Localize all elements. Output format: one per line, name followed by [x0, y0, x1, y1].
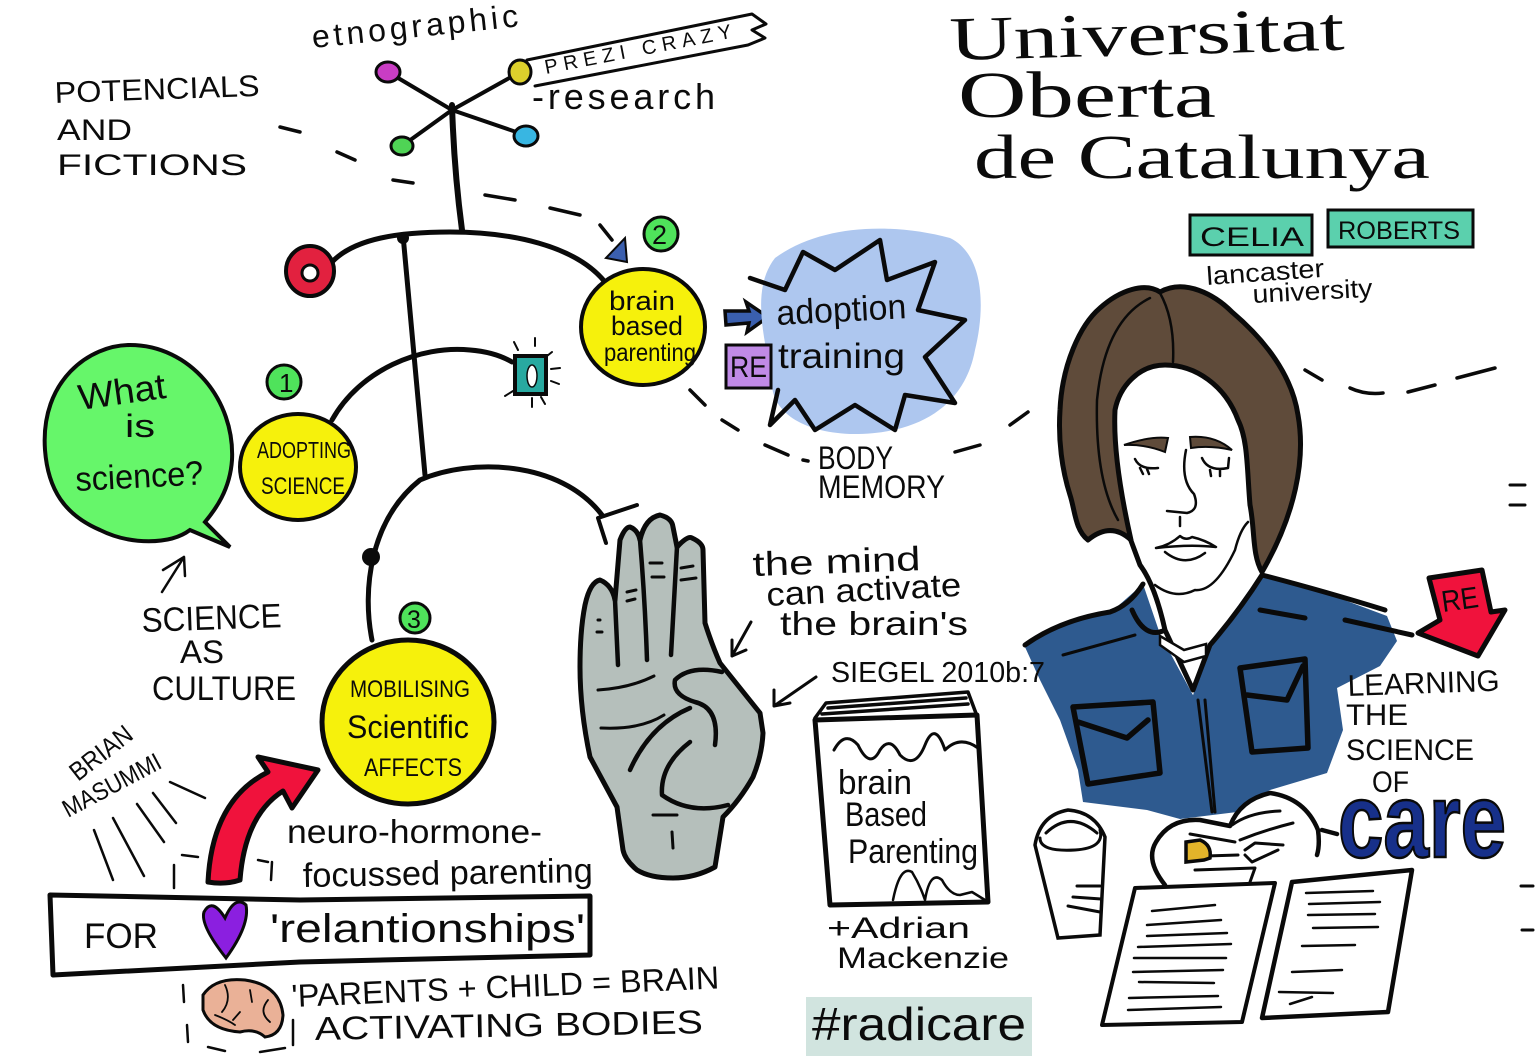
annotation: the mind can activate the brain's: can activate	[765, 566, 962, 613]
burst: adoption training: training	[778, 337, 905, 376]
bubble: mobilising scientific affects: MOBILISING	[350, 676, 470, 703]
icon: glowing teal device	[505, 338, 560, 407]
affiliation: Lancaster University	[1205, 253, 1373, 309]
icon: book brain based parenting	[815, 692, 988, 905]
label: body memory: MEMORY	[818, 469, 945, 505]
dashed connector to blue arrowhead	[280, 127, 627, 262]
speaker name tags	[1190, 210, 1473, 255]
bubble: adopting science: ADOPTING	[257, 437, 351, 463]
label: potencials and fictions: FICTIONS	[57, 149, 247, 182]
icon: book brain based parenting: brain	[838, 764, 912, 802]
burst: adoption training: adoption	[775, 287, 907, 333]
label: neuro-hormone-focussed parenting: neuro-hormone-	[287, 813, 542, 850]
banner: for love relationships: FOR	[84, 917, 158, 956]
label: science as culture with arrow: AS	[180, 634, 224, 670]
bubble: brain based parenting: parenting	[604, 339, 696, 367]
title: Universitat Oberta de Catalunya: Universitat	[949, 0, 1345, 74]
face and neck	[1115, 366, 1258, 695]
label: research: -research	[532, 76, 715, 117]
annotation: Brian Massumi with rays: BRIAN	[63, 719, 138, 787]
tag: RE purple	[726, 345, 771, 388]
red RE arrow	[1418, 570, 1505, 656]
annotation: Brian Massumi with rays	[58, 719, 205, 880]
label: learning the science of: SCIENCE	[1346, 734, 1474, 767]
icon: red curved arrow	[208, 757, 318, 883]
hair	[1059, 287, 1300, 572]
banner: Prezi crazy	[527, 14, 766, 86]
icon: red target node	[286, 246, 334, 296]
blue arrow to adoption training	[725, 302, 768, 332]
bubble: mobilising scientific affects: AFFECTS	[364, 754, 462, 782]
bubble: brain based parenting: brain	[609, 286, 675, 316]
label: body memory: BODY	[818, 440, 893, 476]
dashed frame around heart and brain	[174, 855, 293, 1052]
number badge 2: 2	[652, 220, 667, 250]
label: science as culture with arrow: CULTURE	[152, 670, 296, 708]
label: learning the science of	[1346, 665, 1500, 799]
label: science as culture with arrow: SCIENCE	[141, 597, 282, 640]
speech bubble: what is science	[45, 345, 232, 547]
label: parents + child = brain activating bodies	[291, 959, 720, 1047]
eyes, nose and mouth	[1135, 450, 1248, 594]
annotation: the mind can activate the brain's: the mind	[752, 540, 921, 584]
label: parents + child = brain activating bodies: ACTIVATING BODIES	[314, 1003, 703, 1047]
jacket	[1025, 575, 1397, 819]
number badge 3: 3	[407, 606, 421, 634]
speech bubble: what is science: science?	[74, 454, 204, 499]
margin marks	[1510, 485, 1533, 930]
burst: adoption training	[750, 229, 981, 434]
banner: Prezi crazy: PREZI CRAZY	[543, 21, 733, 79]
title: Universitat Oberta de Catalunya	[949, 0, 1430, 192]
red RE arrow: RE	[1439, 581, 1481, 619]
speech bubble: what is science: What	[75, 365, 168, 418]
main mobile branches	[332, 232, 637, 640]
bubble: adopting science	[240, 414, 356, 520]
label: learning the science of: OF	[1372, 766, 1409, 799]
icon: pink brain	[203, 980, 283, 1037]
eyebrows	[1124, 437, 1232, 452]
label: parents + child = brain activating bodies: 'PARENTS + CHILD = BRAIN	[291, 959, 720, 1014]
necklace	[1160, 636, 1206, 662]
label: neuro-hormone-focussed parenting: focussed parenting	[302, 852, 593, 895]
label: + Adrian Mackenzie	[827, 912, 1009, 975]
label: + Adrian Mackenzie: +Adrian	[827, 912, 970, 945]
label: potencials and fictions	[54, 70, 260, 182]
bubble: brain based parenting: based	[611, 311, 683, 341]
icon: hands holding yellow object	[1152, 793, 1337, 885]
label: neuro-hormone-focussed parenting	[287, 813, 593, 895]
bubble: mobilising scientific affects	[322, 640, 494, 804]
pockets	[1073, 659, 1308, 784]
speaker name tags: ROBERTS	[1338, 217, 1460, 245]
banner: for love relationships	[50, 895, 590, 975]
number badge 2	[644, 217, 678, 251]
number badge 1	[267, 365, 301, 399]
annotation: the mind can activate the brain's: the brain's	[780, 605, 968, 642]
label: potencials and fictions: POTENCIALS	[54, 70, 260, 110]
dashed connector through body memory	[690, 368, 1495, 461]
label: + Adrian Mackenzie: Mackenzie	[837, 942, 1009, 975]
tag: RE purple: RE	[730, 351, 767, 384]
number badge 3	[400, 603, 430, 634]
icon: book brain based parenting: Based	[845, 796, 927, 834]
bubble: brain based parenting	[581, 269, 705, 385]
top mobile with coloured nodes	[376, 60, 538, 230]
bubble: adopting science: SCIENCE	[261, 473, 345, 500]
number badge 1: 1	[279, 368, 293, 398]
title: Universitat Oberta de Catalunya: Oberta	[958, 59, 1216, 132]
label: learning the science of: THE	[1346, 699, 1408, 732]
banner: for love relationships: 'relantionships'	[270, 907, 585, 951]
portrait: Celia Roberts	[1025, 287, 1412, 819]
hashtag box: #radicare: #radicare	[812, 998, 1026, 1050]
label: learning the science of: LEARNING	[1347, 665, 1500, 703]
jaw and collar lines	[1025, 538, 1412, 690]
icon: paper cup	[1035, 810, 1105, 938]
label: science as culture with arrow	[141, 557, 296, 708]
annotation: Brian Massumi with rays: MASUMMI	[58, 748, 166, 823]
speech bubble: what is science: is	[125, 408, 155, 444]
title: Universitat Oberta de Catalunya: de Catalunya	[974, 124, 1430, 192]
bubble: mobilising scientific affects: Scientific	[347, 709, 469, 745]
affiliation: Lancaster University: lancaster	[1205, 253, 1326, 291]
icon: open papers	[1102, 870, 1412, 1025]
speaker name tags: CELIA	[1200, 222, 1304, 252]
annotation: the mind can activate the brain's	[732, 540, 968, 706]
label: potencials and fictions: AND	[57, 114, 132, 147]
icon: purple heart	[203, 902, 247, 958]
label: body memory	[818, 440, 945, 505]
affiliation: Lancaster University: university	[1252, 273, 1373, 309]
icon: book brain based parenting: Parenting	[848, 833, 978, 871]
icon: grey hand	[580, 515, 763, 878]
citation: Siegel 2010b:7: SIEGEL 2010b:7	[831, 657, 1045, 689]
